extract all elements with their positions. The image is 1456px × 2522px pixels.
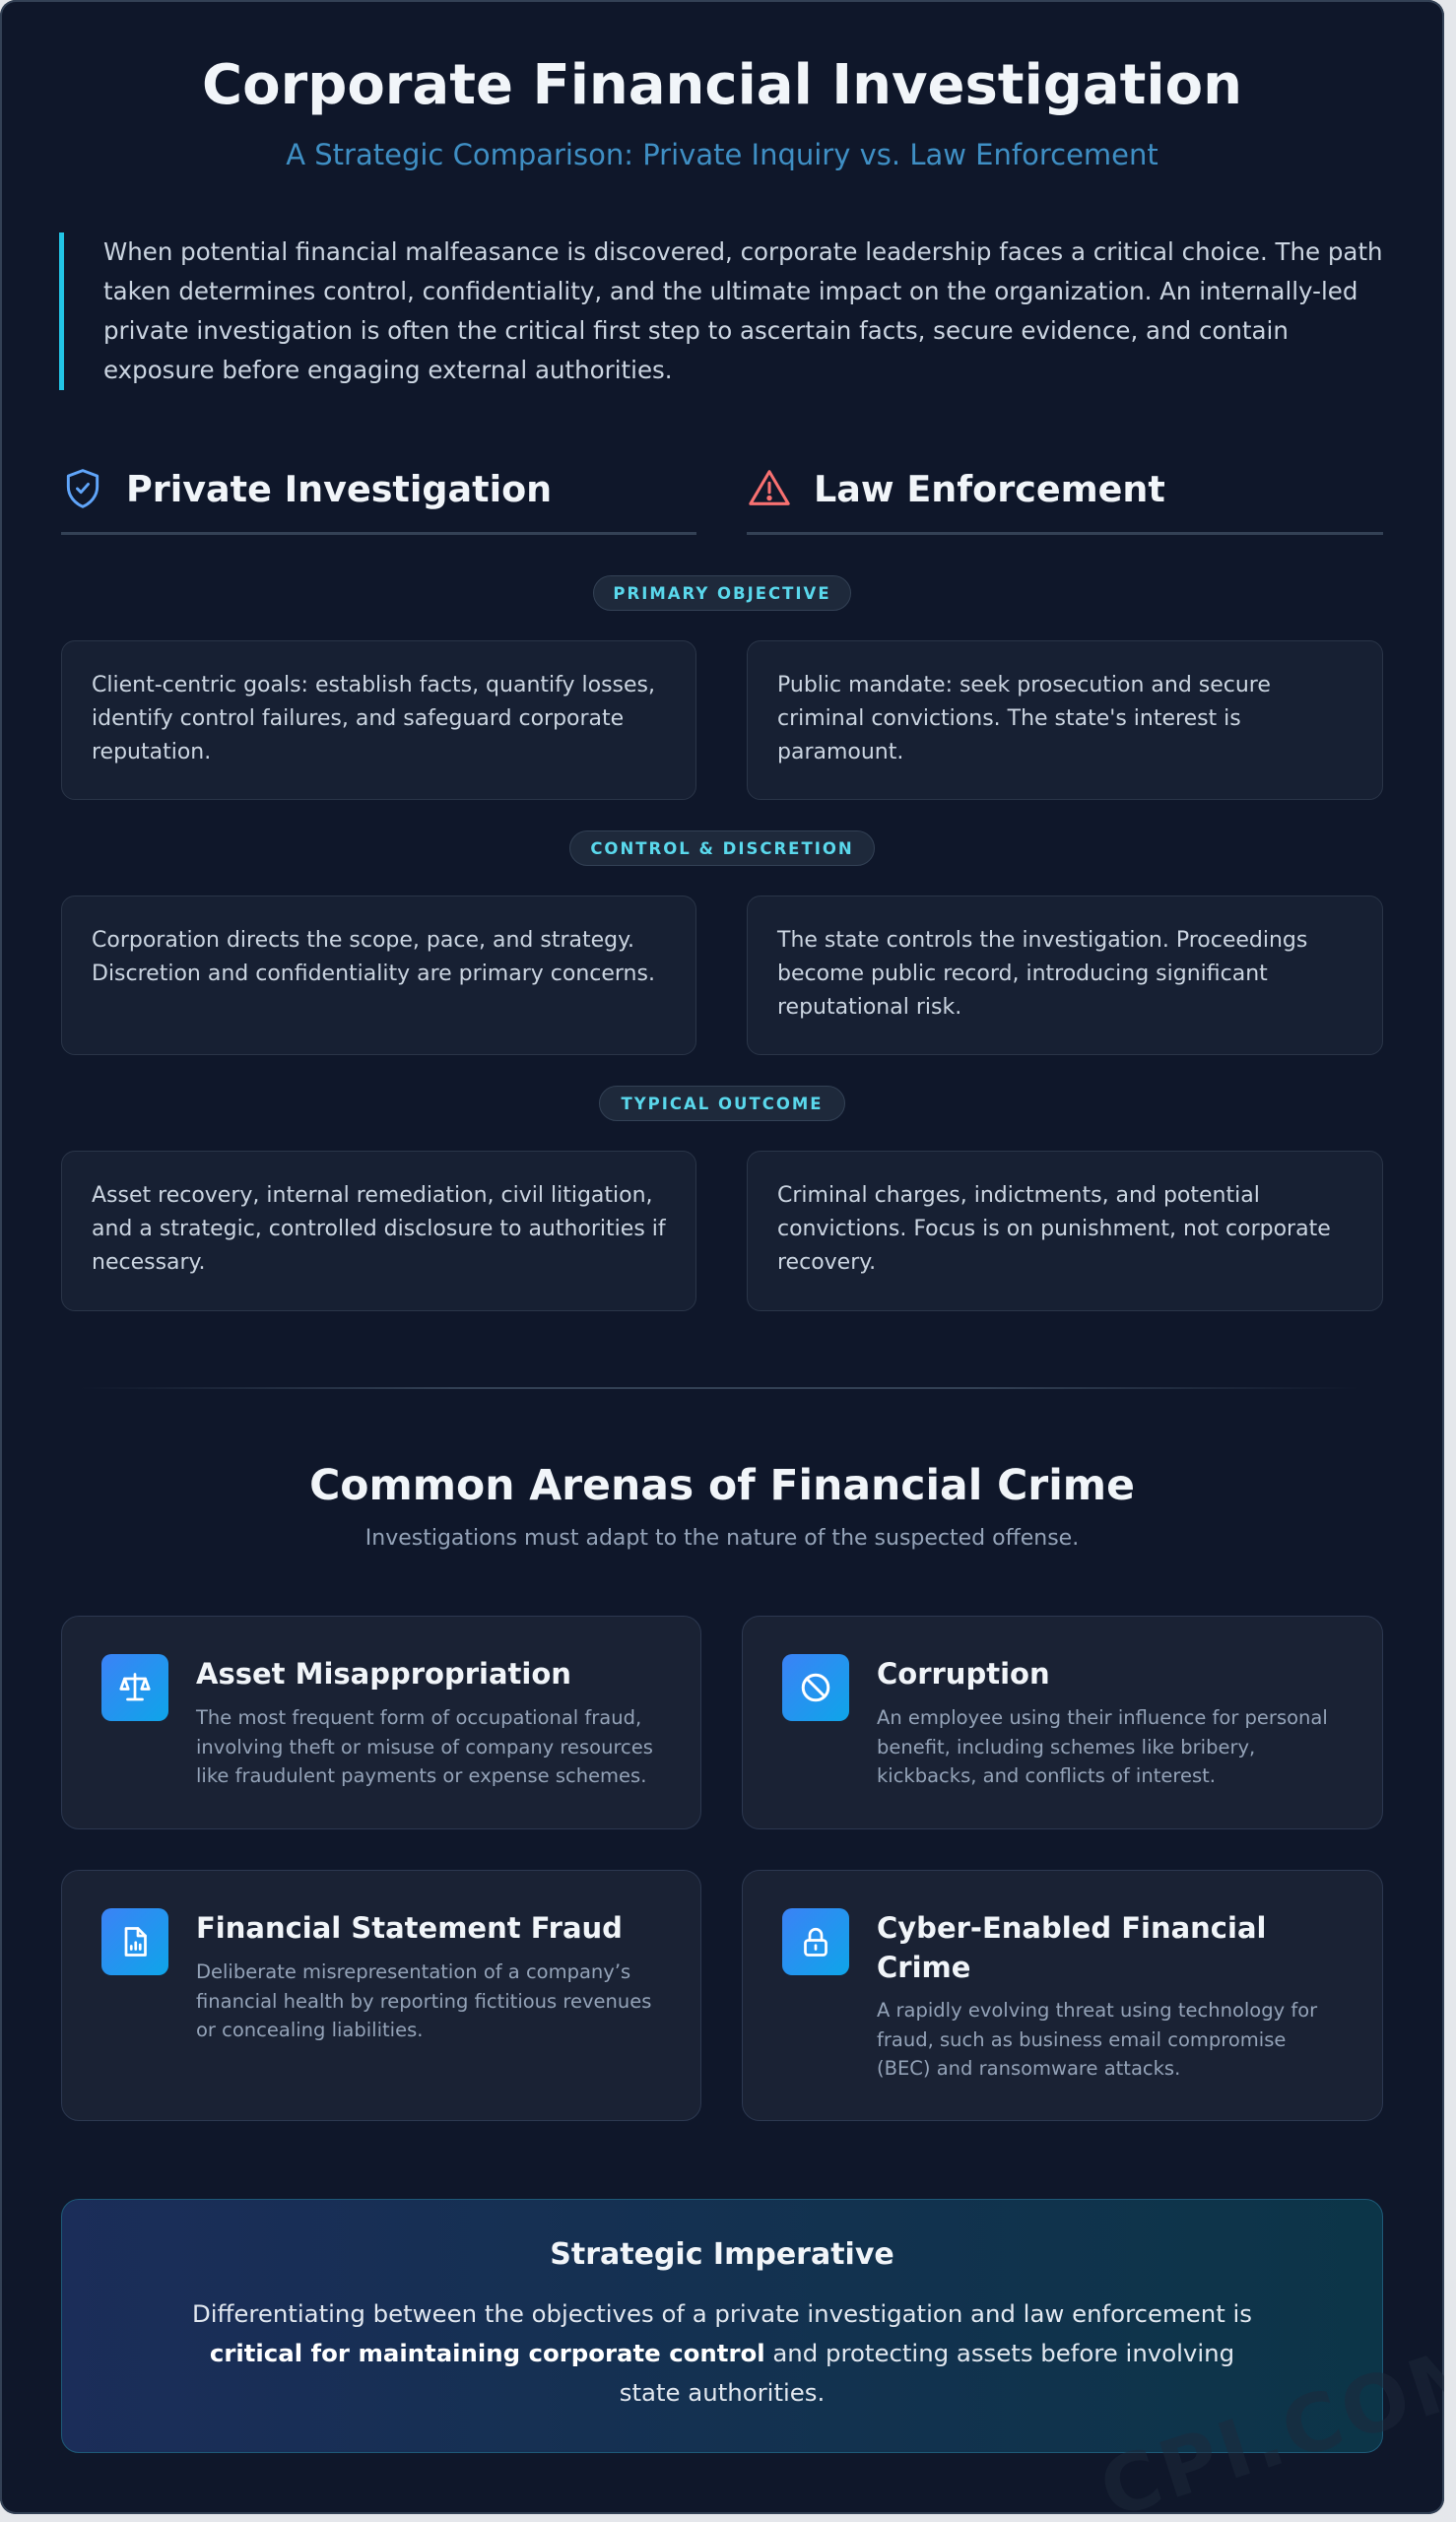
card: private control xyxy=(61,896,696,1055)
section heading: Common Arenas of Financial Crime xyxy=(309,1462,1135,1510)
callout body: Differentiating between the objectives of a private investigation and law enforcement is critical for maintaining corporate control and protecting assets before involving state authorities. xyxy=(192,2299,1252,2407)
card: law outcome: Criminal charges, indictments, and potential convictions. Focus is on punishment, not corporate recovery. xyxy=(777,1183,1331,1275)
card: corruption xyxy=(742,1616,1383,1829)
card: private control: Corporation directs the scope, pace, and strategy. Discretion and confidentiality are primary concerns. xyxy=(92,928,655,986)
icon: warning xyxy=(749,470,790,505)
card: cyber-enabled crime xyxy=(742,1870,1383,2121)
heading: private investigation: Private Investigation xyxy=(126,467,552,510)
heading: law enforcement: Law Enforcement xyxy=(814,467,1165,510)
pill: control & discretion xyxy=(569,830,875,866)
card: financial statement fraud xyxy=(61,1870,701,2121)
card: cyber-enabled crime: Cyber-Enabled Financial Crime xyxy=(877,1911,1266,1984)
card: financial statement fraud: Financial Statement Fraud xyxy=(196,1911,623,1945)
title: Corporate Financial Investigation xyxy=(202,53,1242,117)
card: private objective: Client-centric goals: establish facts, quantify losses, identify control failures, and safeguard corporate reputation. xyxy=(92,673,655,764)
pill: primary objective: PRIMARY OBJECTIVE xyxy=(613,583,831,603)
card: corruption: Corruption xyxy=(877,1657,1050,1691)
section subtitle: Investigations must adapt to the nature of the suspected offense. xyxy=(365,1526,1079,1551)
callout title: Strategic Imperative xyxy=(550,2237,894,2272)
card: corruption: An employee using their influence for personal benefit, including schemes like bribery, kickbacks, and conflicts of interest. xyxy=(877,1706,1328,1787)
card: private outcome: Asset recovery, internal remediation, civil litigation, and a strategic, controlled disclosure to authorities if necessary. xyxy=(92,1183,666,1275)
card: asset misappropriation: The most frequent form of occupational fraud, involving theft or misuse of company resources like fraudulent payments or expense schemes. xyxy=(196,1706,653,1787)
card: law objective: Public mandate: seek prosecution and secure criminal convictions. The state's interest is paramount. xyxy=(777,673,1271,764)
subtitle: A Strategic Comparison: Private Inquiry vs. Law Enforcement xyxy=(286,138,1158,171)
pill: primary objective xyxy=(593,575,851,611)
icon: document chart xyxy=(101,1908,168,1975)
icon: shield xyxy=(67,469,99,508)
card: asset misappropriation xyxy=(61,1616,701,1829)
pill: typical outcome xyxy=(599,1086,845,1121)
icon: lock xyxy=(782,1908,849,1975)
intro text block: When potential financial malfeasance is discovered, corporate leadership faces a critical choice. The path taken determines control, confidentiality, and the ultimate impact on the organization. An internally-led private investigation is often the critical first step to ascertain facts, secure evidence, and contain exposure before engaging external authorities. xyxy=(103,237,1383,384)
icon: ban xyxy=(782,1654,849,1721)
card: asset misappropriation: Asset Misappropriation xyxy=(196,1657,571,1691)
card: financial statement fraud: Deliberate misrepresentation of a company’s financial health by reporting fictitious revenues or concealing liabilities. xyxy=(196,1960,651,2041)
pill: typical outcome: TYPICAL OUTCOME xyxy=(621,1094,824,1113)
card: law objective xyxy=(747,640,1383,800)
icon: scales xyxy=(101,1654,168,1721)
card: private objective xyxy=(61,640,696,800)
card: law outcome xyxy=(747,1151,1383,1311)
card: private outcome xyxy=(61,1151,696,1311)
card: law control: The state controls the investigation. Proceedings become public record, introducing significant reputational risk. xyxy=(777,928,1307,1020)
card: law control xyxy=(747,896,1383,1055)
pill: control & discretion: CONTROL & DISCRETION xyxy=(590,839,854,857)
card: cyber-enabled crime: A rapidly evolving threat using technology for fraud, such as business email compromise (BEC) and ransomware attacks. xyxy=(877,1999,1317,2080)
callout: strategic imperative xyxy=(61,2199,1383,2453)
